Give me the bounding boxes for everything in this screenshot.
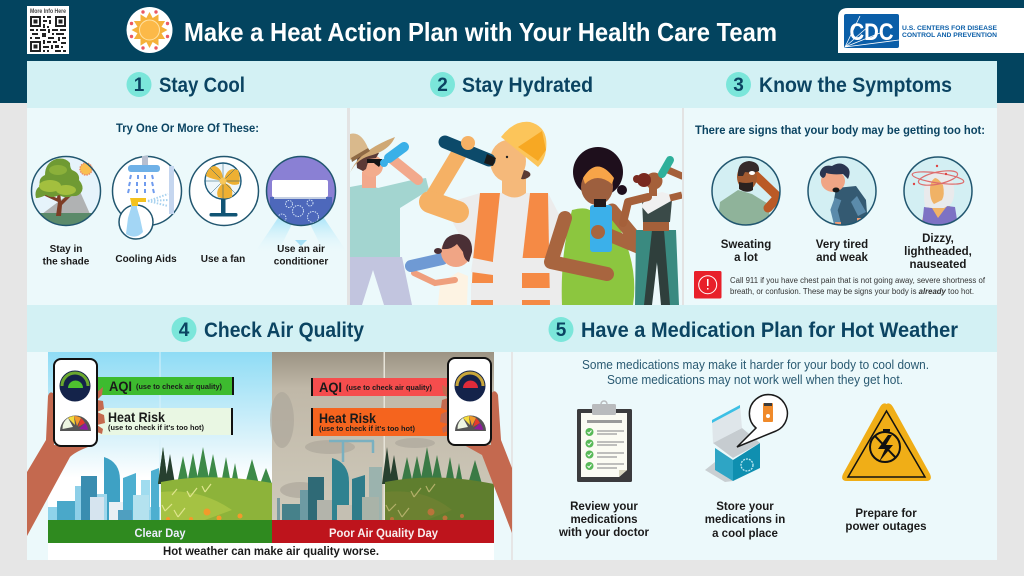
figure: child (411, 234, 472, 305)
text: cooling labels (43, 244, 328, 268)
QR code: More Info Here (30, 9, 67, 15)
text: medication labels: medications (570, 514, 638, 526)
icon: power outage warning (842, 403, 931, 481)
text: medication intro: Some medications may not work well when they get hot. (607, 373, 903, 387)
right Heat Risk label: (use to check if it's too hot) (319, 424, 415, 433)
CDC logo: U.S. CENTERS FOR DISEASE (902, 26, 997, 32)
subheading: signs: There are signs that your body may be getting too hot: (695, 125, 985, 137)
text: cooling labels: conditioner (274, 256, 328, 268)
text: medication intro (582, 358, 929, 387)
icon: cooler with medication (705, 395, 787, 482)
CDC logo: CONTROL AND PREVENTION (902, 33, 997, 39)
icon: right hand holding phone (440, 385, 512, 533)
bar: poor air quality day: Poor Air Quality Day (329, 528, 439, 540)
illustration: people drinking water (350, 122, 682, 305)
heading: 2 Stay Hydrated: 2 (437, 75, 448, 96)
icon: tree in the shade (30, 156, 102, 227)
figure: construction worker (430, 122, 562, 305)
text: medication labels: a cool place (712, 528, 778, 540)
text: symptom labels: a lot (734, 252, 758, 264)
heading: 1 Stay Cool: Stay Cool (159, 74, 245, 97)
title: Make a Heat Action Plan with Your Health Care Team (184, 17, 777, 47)
QR code (27, 6, 69, 54)
city skyline clear (48, 457, 160, 520)
text: medication labels: Review your (570, 501, 638, 513)
heading: 3 Know the Symptoms: 3 (733, 75, 744, 96)
figure: athlete (623, 160, 682, 305)
icon: cooling aids (112, 156, 182, 239)
text: medication labels: Store your (716, 501, 774, 513)
right AQI label: (use to check air quality) (346, 383, 432, 392)
city skyline hazy (277, 440, 382, 520)
text: medication labels: medications in (705, 514, 785, 526)
text: cooling labels: Stay in (50, 244, 82, 255)
icon: warning alert (694, 271, 722, 298)
icon: right phone with gauges (448, 358, 491, 445)
text: medication intro: Some medications may make it harder for your body to cool down. (582, 358, 929, 372)
text: medication labels: with your doctor (558, 527, 650, 539)
left AQI label: AQI (109, 378, 132, 394)
caption: hot weather (48, 543, 494, 560)
CDC logo (838, 8, 1024, 53)
text: symptom labels: and weak (816, 252, 868, 264)
text: cooling labels: Use a fan (201, 254, 245, 265)
icon: left phone with gauges (54, 359, 97, 446)
text: symptom labels: nauseated (910, 259, 966, 271)
panel: air quality scene poor day (270, 352, 494, 521)
callout: call 911: breath, or confusion. These may be signs your body is already too hot. (730, 287, 974, 296)
text: symptom labels: Sweating (721, 239, 771, 251)
heading: 2 Stay Hydrated: Stay Hydrated (462, 74, 593, 97)
CDC logo: CDC (850, 19, 894, 46)
heading: 5 Have a Medication Plan for Hot Weather: 5 (556, 320, 567, 341)
heading: 2 Stay Hydrated (430, 72, 593, 97)
icon: sweating man (712, 157, 780, 228)
text: medication labels: Prepare for (855, 508, 917, 520)
meadow hazy (382, 447, 494, 521)
bar: clear day: Clear Day (134, 528, 186, 540)
icon: dizzy woman (904, 157, 972, 226)
callout: call 911: Call 911 if you have chest pain that is not going away, severe shortness of (730, 276, 986, 285)
text: symptom labels: Dizzy, (922, 233, 954, 245)
left Heat Risk label (97, 408, 233, 435)
left Heat Risk label: (use to check if it's too hot) (108, 423, 204, 432)
heading: 5 Have a Medication Plan for Hot Weather: Have a Medication Plan for Hot Weather (581, 319, 958, 342)
bar: poor air quality day (272, 520, 494, 543)
left AQI label (97, 377, 234, 395)
text: medication labels: power outages (845, 521, 927, 533)
text: cooling labels: Use an air (277, 244, 325, 255)
right Heat Risk label: Heat Risk (319, 410, 376, 426)
right AQI label: AQI (319, 379, 342, 395)
bar: clear day (48, 520, 272, 543)
text: symptom labels: lightheaded, (904, 246, 972, 258)
header band (0, 0, 1024, 103)
text: cooling labels: Cooling Aids (115, 254, 177, 265)
right AQI label (311, 378, 448, 396)
icon: left hand holding phone (27, 387, 105, 536)
meadow clear (158, 447, 272, 521)
left Heat Risk label: Heat Risk (108, 409, 165, 425)
heading: 4 Check Air Quality: 4 (179, 320, 190, 341)
figure: man in hat (350, 134, 429, 305)
subheading: try one or more: Try One Or More Of These: (116, 123, 259, 135)
icon: sun with hearts (126, 7, 172, 53)
text: symptom labels: Very tired (816, 239, 868, 251)
text: symptom labels (721, 233, 972, 271)
heading: 1 Stay Cool: 1 (134, 75, 145, 96)
left AQI label: (use to check air quality) (136, 382, 222, 391)
right Heat Risk label (311, 408, 448, 436)
icon: tired person (808, 157, 876, 228)
figure: pregnant woman (551, 147, 645, 305)
caption: hot weather: Hot weather can make air quality worse. (163, 546, 379, 558)
heading: 1 Stay Cool (126, 72, 245, 97)
text: medication labels (558, 501, 927, 540)
icon: air conditioner (263, 156, 340, 246)
icon: clipboard (577, 401, 632, 482)
panel: air quality scene clear day (48, 352, 272, 521)
heading: 3 Know the Symptoms: Know the Symptoms (759, 74, 952, 97)
text: cooling labels: the shade (43, 256, 90, 268)
callout: call 911 (730, 276, 986, 296)
icon: fan (190, 156, 258, 226)
heading: 4 Check Air Quality: Check Air Quality (204, 319, 364, 342)
